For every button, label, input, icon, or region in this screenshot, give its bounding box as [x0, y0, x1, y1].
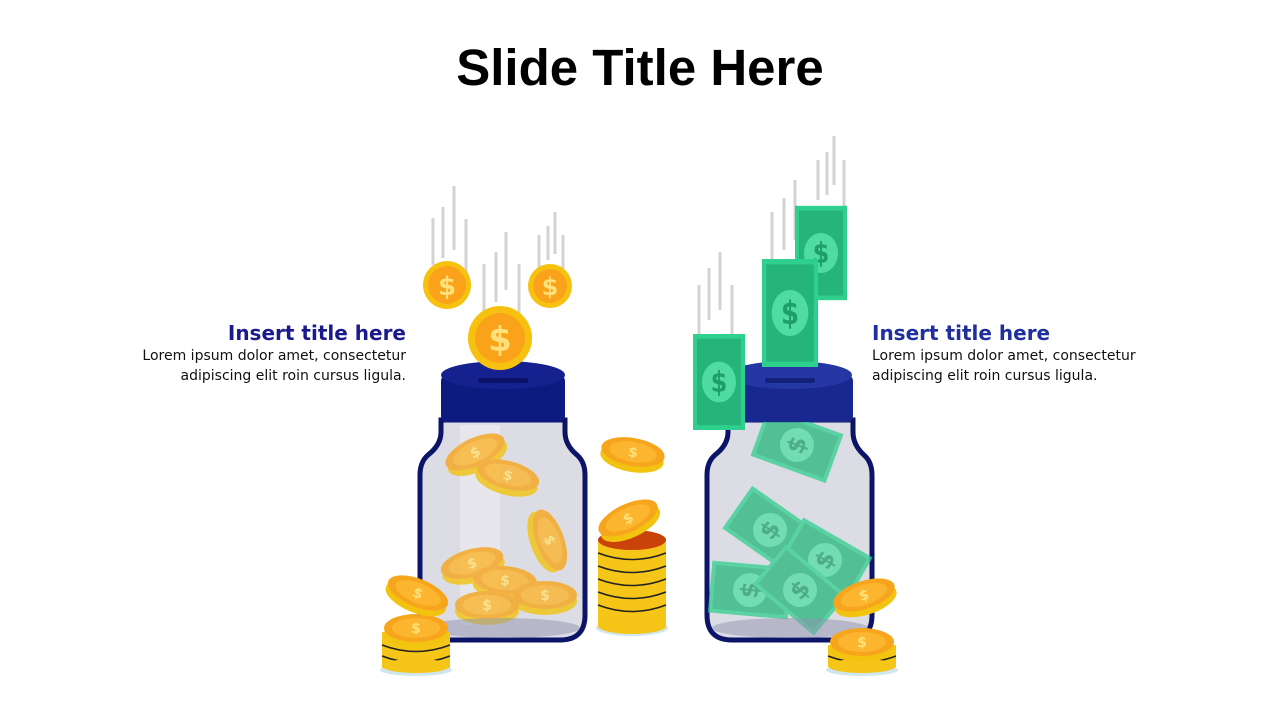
coins right of jar 2: [826, 572, 901, 676]
lid: [441, 375, 565, 422]
text block: right: Insert title here: [872, 321, 1050, 345]
text block: right: Lorem ipsum dolor amet, consectetur: [872, 348, 1136, 364]
falling bills with motion lines: [693, 136, 847, 430]
falling coins with motion lines: $: [488, 320, 512, 360]
text block: left: Lorem ipsum dolor amet, consectetur: [142, 348, 406, 364]
coin stack right of jar 1: [593, 433, 668, 636]
falling coins with motion lines: $: [542, 273, 558, 301]
text block: left: [142, 321, 406, 384]
text block: left: adipiscing elit roin cursus ligula.: [181, 368, 406, 384]
text block: right: [872, 321, 1136, 384]
coin stack left of jar 1: [380, 568, 453, 676]
falling coins with motion lines: [423, 186, 572, 370]
jar 1 with coins: [420, 361, 585, 640]
lid: [728, 375, 853, 422]
falling coins with motion lines: $: [438, 272, 456, 302]
text block: right: adipiscing elit roin cursus ligula.: [872, 368, 1097, 384]
text block: left: Insert title here: [228, 321, 406, 345]
jar 2 with bills: [707, 361, 873, 640]
title: Slide Title Here: [456, 39, 824, 96]
